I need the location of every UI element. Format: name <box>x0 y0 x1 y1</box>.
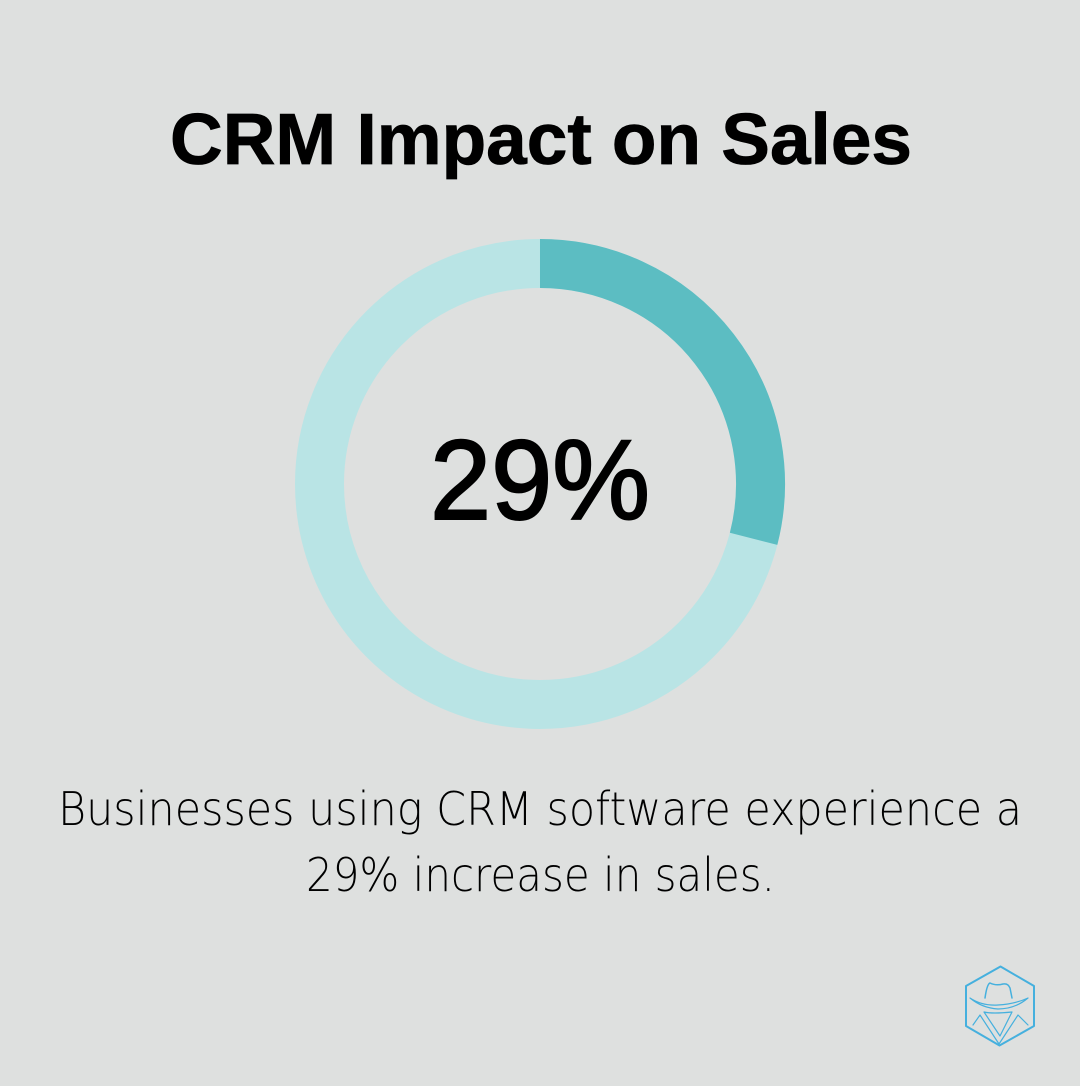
icon: logo hexagon with hat and collar <box>966 966 1034 1046</box>
center value: 29% <box>430 417 650 543</box>
donut chart: 29% <box>320 264 761 704</box>
description text <box>58 782 1022 902</box>
description text: Businesses using CRM software experience a <box>58 782 1022 836</box>
description text: 29% increase in sales. <box>306 848 775 902</box>
title: CRM Impact on Sales <box>170 100 912 180</box>
